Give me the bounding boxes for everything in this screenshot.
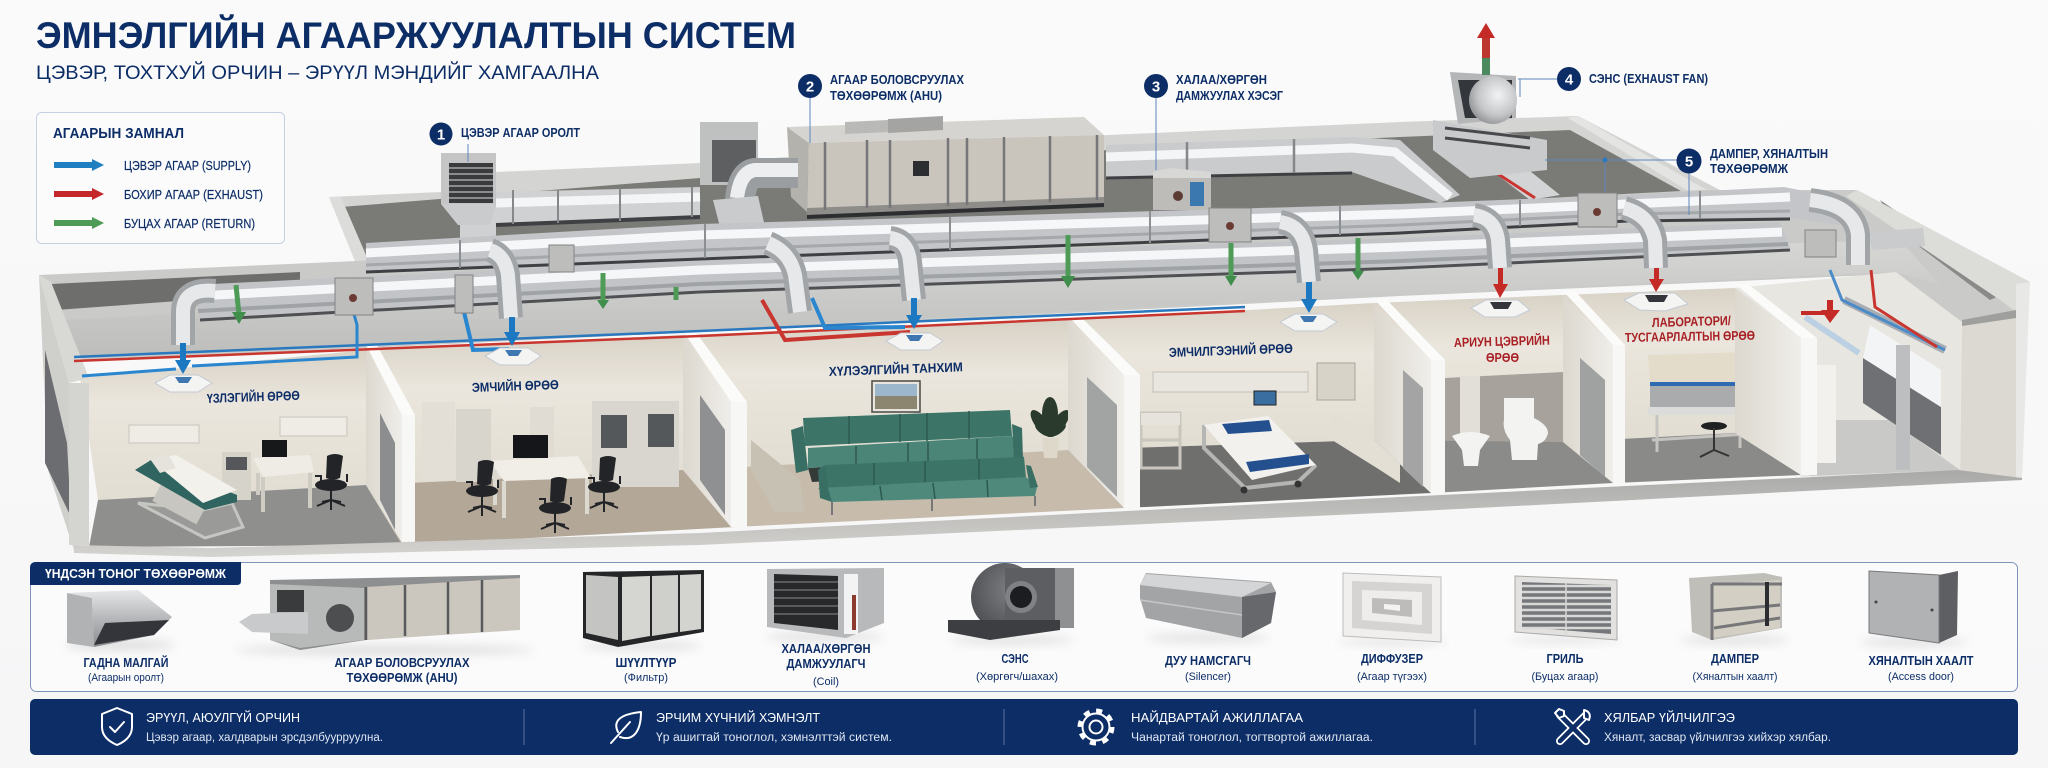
equipment: AHU: ТӨХӨӨРӨМЖ (AHU) xyxy=(346,671,458,685)
dampers on duct xyxy=(335,193,1836,315)
floor slab front edge xyxy=(74,470,2022,557)
air handling unit on roof xyxy=(713,116,1104,227)
equipment: fan: (Хөргөгч/шахах) xyxy=(976,671,1058,683)
benefit: healthy, safe environment xyxy=(102,708,383,745)
supply air arrows xyxy=(175,282,1317,374)
ceiling diffusers xyxy=(155,293,1688,392)
room label: treatment: ЭМЧИЛГЭЭНИЙ ӨРӨӨ xyxy=(1169,341,1293,360)
title: ЭМНЭЛГИЙН АГААРЖУУЛАЛТЫН СИСТЕМ xyxy=(36,14,796,56)
potted plant xyxy=(1027,397,1073,458)
equipment: coil xyxy=(765,568,885,688)
equipment: filter xyxy=(582,570,704,684)
equipment: fan: СЭНС xyxy=(1002,652,1028,666)
callout 2: AHU: АГААР БОЛОВСРУУЛАХ xyxy=(830,73,965,87)
benefit: energy saving xyxy=(611,710,892,744)
exhaust fan unit xyxy=(1433,72,1547,178)
room label: restroom: АРИУН ЦЭВРИЙН xyxy=(1454,332,1550,350)
equipment: diffuser xyxy=(1338,573,1446,683)
callout 1: fresh air intake: ЦЭВЭР АГААР ОРОЛТ xyxy=(461,126,580,140)
return air arrows xyxy=(232,235,1364,324)
unit beside AHU xyxy=(700,122,758,185)
legend: supply: ЦЭВЭР АГААР (SUPPLY) xyxy=(124,158,251,173)
corridor with glazed partition xyxy=(1735,272,1962,477)
callout 3: heating/cooling: 3 xyxy=(1152,78,1160,96)
legend: exhaust: БОХИР АГААР (EXHAUST) xyxy=(124,187,263,202)
left outer wall xyxy=(39,275,89,550)
equipment: fan xyxy=(948,563,1074,683)
exhaust air arrows xyxy=(1493,268,1840,323)
benefit: easy service: ХЯЛБАР ҮЙЛЧИЛГЭЭ xyxy=(1604,710,1735,725)
equipment: grille xyxy=(1509,576,1621,683)
room label: laboratory: ЛАБОРАТОРИ/ xyxy=(1652,313,1731,330)
equipment: grille: (Буцах агаар) xyxy=(1532,671,1598,683)
equipment: coil: ДАМЖУУЛАГЧ xyxy=(786,657,866,671)
callout 4: exhaust fan: СЭНС (EXHAUST FAN) xyxy=(1589,72,1708,86)
front sofa xyxy=(818,457,1038,515)
room label: examination: ҮЗЛЭГИЙН ӨРӨӨ xyxy=(207,388,300,406)
room label: doctor: ЭМЧИЙН ӨРӨӨ xyxy=(472,377,559,395)
callout 3: heating/cooling xyxy=(1144,73,1283,170)
equipment: coil: (Coil) xyxy=(813,676,839,688)
icon: leaf xyxy=(611,712,641,743)
benefit: reliable operation xyxy=(1080,710,1373,744)
callout 3: heating/cooling: ХАЛАА/ХӨРГӨН xyxy=(1176,73,1267,87)
callout 5: damper, control device: 5 xyxy=(1685,154,1693,170)
partition walls xyxy=(366,284,1817,545)
equipment: silencer xyxy=(1140,573,1276,683)
equipment: silencer: ДУУ НАМСГАГЧ xyxy=(1165,654,1251,668)
heating/cooling module xyxy=(1153,168,1211,210)
icon: gear xyxy=(1080,711,1112,743)
equipment: coil: ХАЛАА/ХӨРГӨН xyxy=(782,642,870,656)
benefit: energy saving: Үр ашигтай тоноглол, хэмнэлттэй систем. xyxy=(656,732,892,744)
benefit: easy service: Хяналт, засвар үйлчилгээ хийхэр хялбар. xyxy=(1604,732,1831,744)
benefit: healthy, safe environment: Цэвэр агаар, халдварын эрсдэлбуурруулна. xyxy=(146,732,383,744)
equipment: damper: ДАМПЕР xyxy=(1711,652,1759,666)
equipment: damper: (Хяналтын хаалт) xyxy=(1692,671,1778,683)
callout 2: AHU: 2 xyxy=(806,78,814,96)
lower roof section xyxy=(39,190,2030,362)
outside air intake louver xyxy=(441,153,496,225)
callout 5: damper, control device xyxy=(1545,147,1828,215)
callout 2: AHU xyxy=(798,73,965,143)
equipment: diffuser: ДИФФУЗЕР xyxy=(1361,652,1423,666)
building cutaway illustration xyxy=(39,23,2030,557)
room label: restroom xyxy=(1454,332,1550,365)
icon: tools xyxy=(1555,709,1590,741)
legend: return: БУЦАХ АГААР (RETURN) xyxy=(124,216,255,231)
callout 1: fresh air intake: 1 xyxy=(437,126,445,144)
equipment: filter: (Фильтр) xyxy=(624,672,668,684)
callout 5: damper, control device: ТӨХӨӨРӨМЖ xyxy=(1710,162,1789,176)
equipment: grille: ГРИЛЬ xyxy=(1546,652,1584,666)
exhaust outlet arrow xyxy=(1477,23,1495,75)
rear roof section xyxy=(329,116,1720,266)
panel: main equipment xyxy=(30,562,2018,692)
benefit: easy service xyxy=(1555,709,1831,744)
equipment: access door xyxy=(1860,571,1974,683)
room 2 interior xyxy=(366,335,735,545)
equipment: diffuser: (Агаар түгээх) xyxy=(1357,671,1427,683)
panel tab heading: ҮНДСЭН ТОНОГ ТӨХӨӨРӨМЖ xyxy=(45,567,227,581)
panel: benefits bar xyxy=(30,699,2018,755)
equipment: AHU xyxy=(235,575,535,685)
legend heading: АГААРЫН ЗАМНАЛ xyxy=(53,125,184,142)
room label: waiting hall: ХҮЛЭЭЛГИЙН ТАНХИМ xyxy=(829,359,963,379)
ceiling edge supply and exhaust lines xyxy=(74,270,1945,376)
room 3 interior xyxy=(683,320,1124,527)
callout 3: heating/cooling: ДАМЖУУЛАХ ХЭСЭГ xyxy=(1176,89,1283,103)
equipment: outdoor hood xyxy=(65,590,175,684)
benefit: energy saving: ЭРЧИМ ХҮЧНИЙ ХЭМНЭЛТ xyxy=(656,710,820,725)
callout 1: fresh air intake xyxy=(430,122,580,162)
room label: restroom: ӨРӨӨ xyxy=(1486,350,1519,365)
panel: air path legend xyxy=(36,112,284,244)
room 5 interior xyxy=(1374,295,1613,493)
icon: shield xyxy=(102,708,132,745)
main duct, rear run xyxy=(192,222,1790,320)
legend: supply xyxy=(54,158,251,173)
room label: laboratory xyxy=(1625,313,1755,345)
equipment: damper xyxy=(1681,573,1789,683)
equipment: access door: (Access door) xyxy=(1888,671,1954,683)
panel tab heading xyxy=(30,562,241,585)
callout 2: AHU: ТӨХӨӨРӨМЖ (AHU) xyxy=(830,89,942,103)
legend: return xyxy=(54,216,255,231)
benefit: reliable operation: Чанартай тоноглол, тогтвортой ажиллагаа. xyxy=(1131,732,1373,744)
room 6 interior xyxy=(1563,288,1801,483)
legend: exhaust xyxy=(54,187,263,202)
rooftop ductwork xyxy=(183,23,1858,345)
benefit: healthy, safe environment: ЭРҮҮЛ, АЮУЛГҮЙ ОРЧИН xyxy=(146,710,300,725)
equipment: outdoor hood: (Агаарын оролт) xyxy=(88,672,164,684)
supply duct to rear right xyxy=(1106,137,1560,203)
equipment: outdoor hood: ГАДНА МАЛГАЙ xyxy=(84,655,169,670)
equipment: access door: ХЯНАЛТЫН ХААЛТ xyxy=(1868,654,1974,668)
subtitle: ЦЭВЭР, ТОХТХУЙ ОРЧИН – ЭРҮҮЛ МЭНДИЙГ ХАМГААЛНА xyxy=(36,60,599,84)
branch elbows xyxy=(183,200,1858,345)
benefit: reliable operation: НАЙДВАРТАЙ АЖИЛЛАГАА xyxy=(1131,710,1304,725)
callout 4: exhaust fan xyxy=(1518,67,1708,97)
main duct, front run xyxy=(366,187,1840,272)
room label: laboratory: ТУСГААРЛАЛТЫН ӨРӨӨ xyxy=(1625,328,1755,345)
callout 4: exhaust fan: 4 xyxy=(1565,72,1574,88)
right outer wall xyxy=(1960,282,2030,483)
room 1 interior xyxy=(80,350,402,547)
intake duct xyxy=(460,187,700,240)
callout 5: damper, control device: ДАМПЕР, ХЯНАЛТЫН xyxy=(1710,147,1828,161)
rear sofa xyxy=(791,410,1024,482)
room 4 interior xyxy=(1068,303,1431,508)
equipment: filter: ШҮҮЛТҮҮР xyxy=(616,656,676,670)
exam bed xyxy=(135,454,243,538)
equipment: AHU: АГААР БОЛОВСРУУЛАХ xyxy=(334,656,470,670)
equipment: silencer: (Silencer) xyxy=(1185,671,1231,683)
